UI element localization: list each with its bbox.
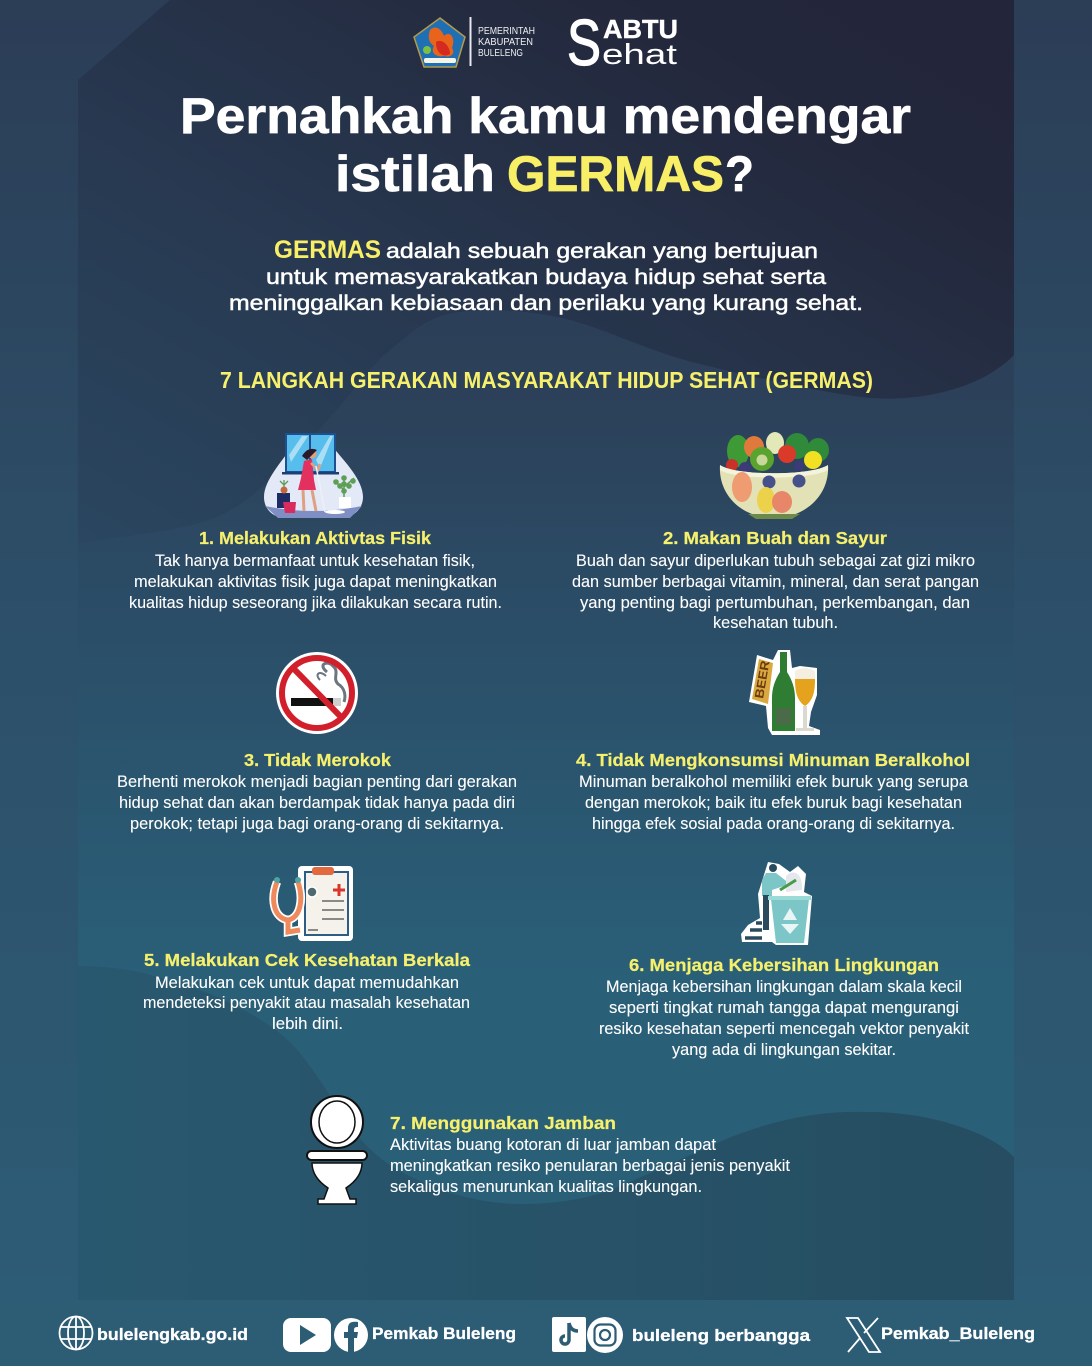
step text: Melakukan cek untuk dapat memudahkan — [155, 974, 459, 992]
icon: salad bowl — [720, 432, 829, 519]
intro paragraph: adalah sebuah gerakan yang bertujuan — [386, 239, 818, 263]
X account — [847, 1318, 1035, 1352]
TikTok and Instagram — [552, 1317, 811, 1353]
step text: lebih dini. — [272, 1015, 343, 1033]
X account: Pemkab_Buleleng — [881, 1324, 1035, 1343]
icon: Instagram — [587, 1317, 623, 1353]
icon: toilet — [307, 1096, 367, 1204]
step text — [117, 773, 517, 833]
step 5: health check — [143, 866, 470, 1033]
step heading: 1. Melakukan Aktivtas Fisik — [199, 528, 431, 548]
step text: dengan merokok; baik itu efek buruk bagi kesehatan — [585, 794, 962, 812]
step heading: 2. Makan Buah dan Sayur — [663, 528, 887, 548]
intro paragraph: GERMAS — [274, 236, 381, 264]
step text: dan sumber berbagai vitamin, mineral, dan serat pangan — [572, 573, 979, 591]
title: istilah — [335, 146, 495, 202]
step 1: physical activity — [129, 433, 502, 612]
step heading: 3. Tidak Merokok — [244, 750, 391, 770]
intro paragraph: untuk memasyarakatkan budaya hidup sehat serta — [266, 265, 826, 289]
step text — [599, 978, 969, 1059]
step 2: fruit and vegetables — [572, 432, 979, 632]
step 7: use latrine — [307, 1096, 790, 1204]
icon: globe — [60, 1316, 92, 1350]
step text: resiko kesehatan seperti mencegah vektor penyakit — [599, 1020, 969, 1038]
icon: YouTube — [283, 1318, 331, 1352]
step text: mendeteksi penyakit atau masalah kesehatan — [143, 994, 470, 1012]
step text: kualitas hidup seseorang jika dilakukan secara rutin. — [129, 594, 502, 612]
government label: PEMERINTAH — [478, 26, 535, 37]
YouTube and Facebook — [283, 1318, 516, 1352]
step text: perokok; tetapi juga bagi orang-orang di sekitarnya. — [130, 815, 504, 833]
step text: Aktivitas buang kotoran di luar jamban dapat — [390, 1136, 716, 1154]
TikTok and Instagram: buleleng berbangga — [632, 1326, 811, 1345]
step text: melakukan aktivitas fisik juga dapat meningkatkan — [134, 573, 497, 591]
step heading: 4. Tidak Mengkonsumsi Minuman Beralkohol — [576, 750, 970, 770]
step 3: no smoking — [117, 652, 517, 833]
footer social links — [60, 1316, 1035, 1353]
icon: Facebook — [334, 1318, 368, 1352]
step text — [143, 974, 470, 1033]
step text — [129, 552, 502, 612]
icon: no smoking sign — [276, 652, 358, 734]
title: GERMAS — [507, 146, 724, 202]
step text: yang penting bagi pertumbuhan, perkembangan, dan — [580, 594, 970, 612]
step text: sekaligus menurunkan kualitas lingkungan. — [390, 1178, 702, 1196]
Sabtu Sehat logo — [567, 6, 678, 79]
step text — [579, 773, 969, 833]
step text — [572, 552, 979, 632]
YouTube and Facebook: Pemkab Buleleng — [372, 1324, 516, 1343]
step text: Menjaga kebersihan lingkungan dalam skala kecil — [606, 978, 962, 996]
intro paragraph: meninggalkan kebiasaan dan perilaku yang kurang sehat. — [229, 291, 863, 315]
icon: X — [847, 1318, 880, 1352]
icon: Buleleng regency crest — [414, 18, 465, 67]
section heading: 7 LANGKAH GERAKAN MASYARAKAT HIDUP SEHAT (GERMAS) — [220, 367, 873, 393]
icon: beer bottle and glass — [749, 650, 820, 735]
icon: TikTok — [552, 1317, 586, 1352]
icon: beer bottle and glass: BEER — [752, 660, 773, 700]
step text: Berhenti merokok menjadi bagian penting dari gerakan — [117, 773, 517, 791]
step text: Buah dan sayur diperlukan tubuh sebagai zat gizi mikro — [576, 552, 975, 570]
icon: person recycling trash — [741, 862, 812, 945]
step heading: 6. Menjaga Kebersihan Lingkungan — [629, 955, 939, 975]
step heading: 5. Melakukan Cek Kesehatan Berkala — [144, 950, 470, 970]
step text: kesehatan tubuh. — [713, 614, 838, 632]
title: ? — [725, 146, 754, 202]
step text: hingga efek sosial pada orang-orang di sekitarnya. — [592, 815, 955, 833]
step 6: clean environment — [599, 862, 969, 1059]
step heading: 7. Menggunakan Jamban — [390, 1113, 616, 1133]
step text — [390, 1136, 790, 1196]
title: Pernahkah kamu mendengar — [180, 88, 911, 144]
government label — [478, 26, 535, 59]
website — [60, 1316, 248, 1350]
government label: BULELENG — [478, 48, 523, 59]
step text: yang ada di lingkungan sekitar. — [672, 1041, 896, 1059]
icon: clipboard and stethoscope — [274, 866, 353, 941]
Sabtu Sehat logo: ABTU — [603, 14, 678, 44]
step text: hidup sehat dan akan berdampak tidak hanya pada diri — [119, 794, 515, 812]
Sabtu Sehat logo: ehat — [602, 39, 677, 71]
title — [180, 88, 911, 202]
Sabtu Sehat logo: S — [567, 6, 601, 79]
step 4: no alcohol — [576, 650, 970, 833]
step text: Minuman beralkohol memiliki efek buruk yang serupa — [579, 773, 969, 791]
icon: woman mopping — [264, 433, 363, 518]
step text: meningkatkan resiko penularan berbagai jenis penyakit — [390, 1157, 790, 1175]
header logos — [414, 6, 678, 79]
intro paragraph — [229, 236, 863, 315]
website: bulelengkab.go.id — [97, 1325, 248, 1344]
step text: seperti tingkat rumah tangga dapat mengurangi — [609, 999, 959, 1017]
step text: Tak hanya bermanfaat untuk kesehatan fisik, — [155, 552, 475, 570]
government label: KABUPATEN — [478, 37, 533, 48]
